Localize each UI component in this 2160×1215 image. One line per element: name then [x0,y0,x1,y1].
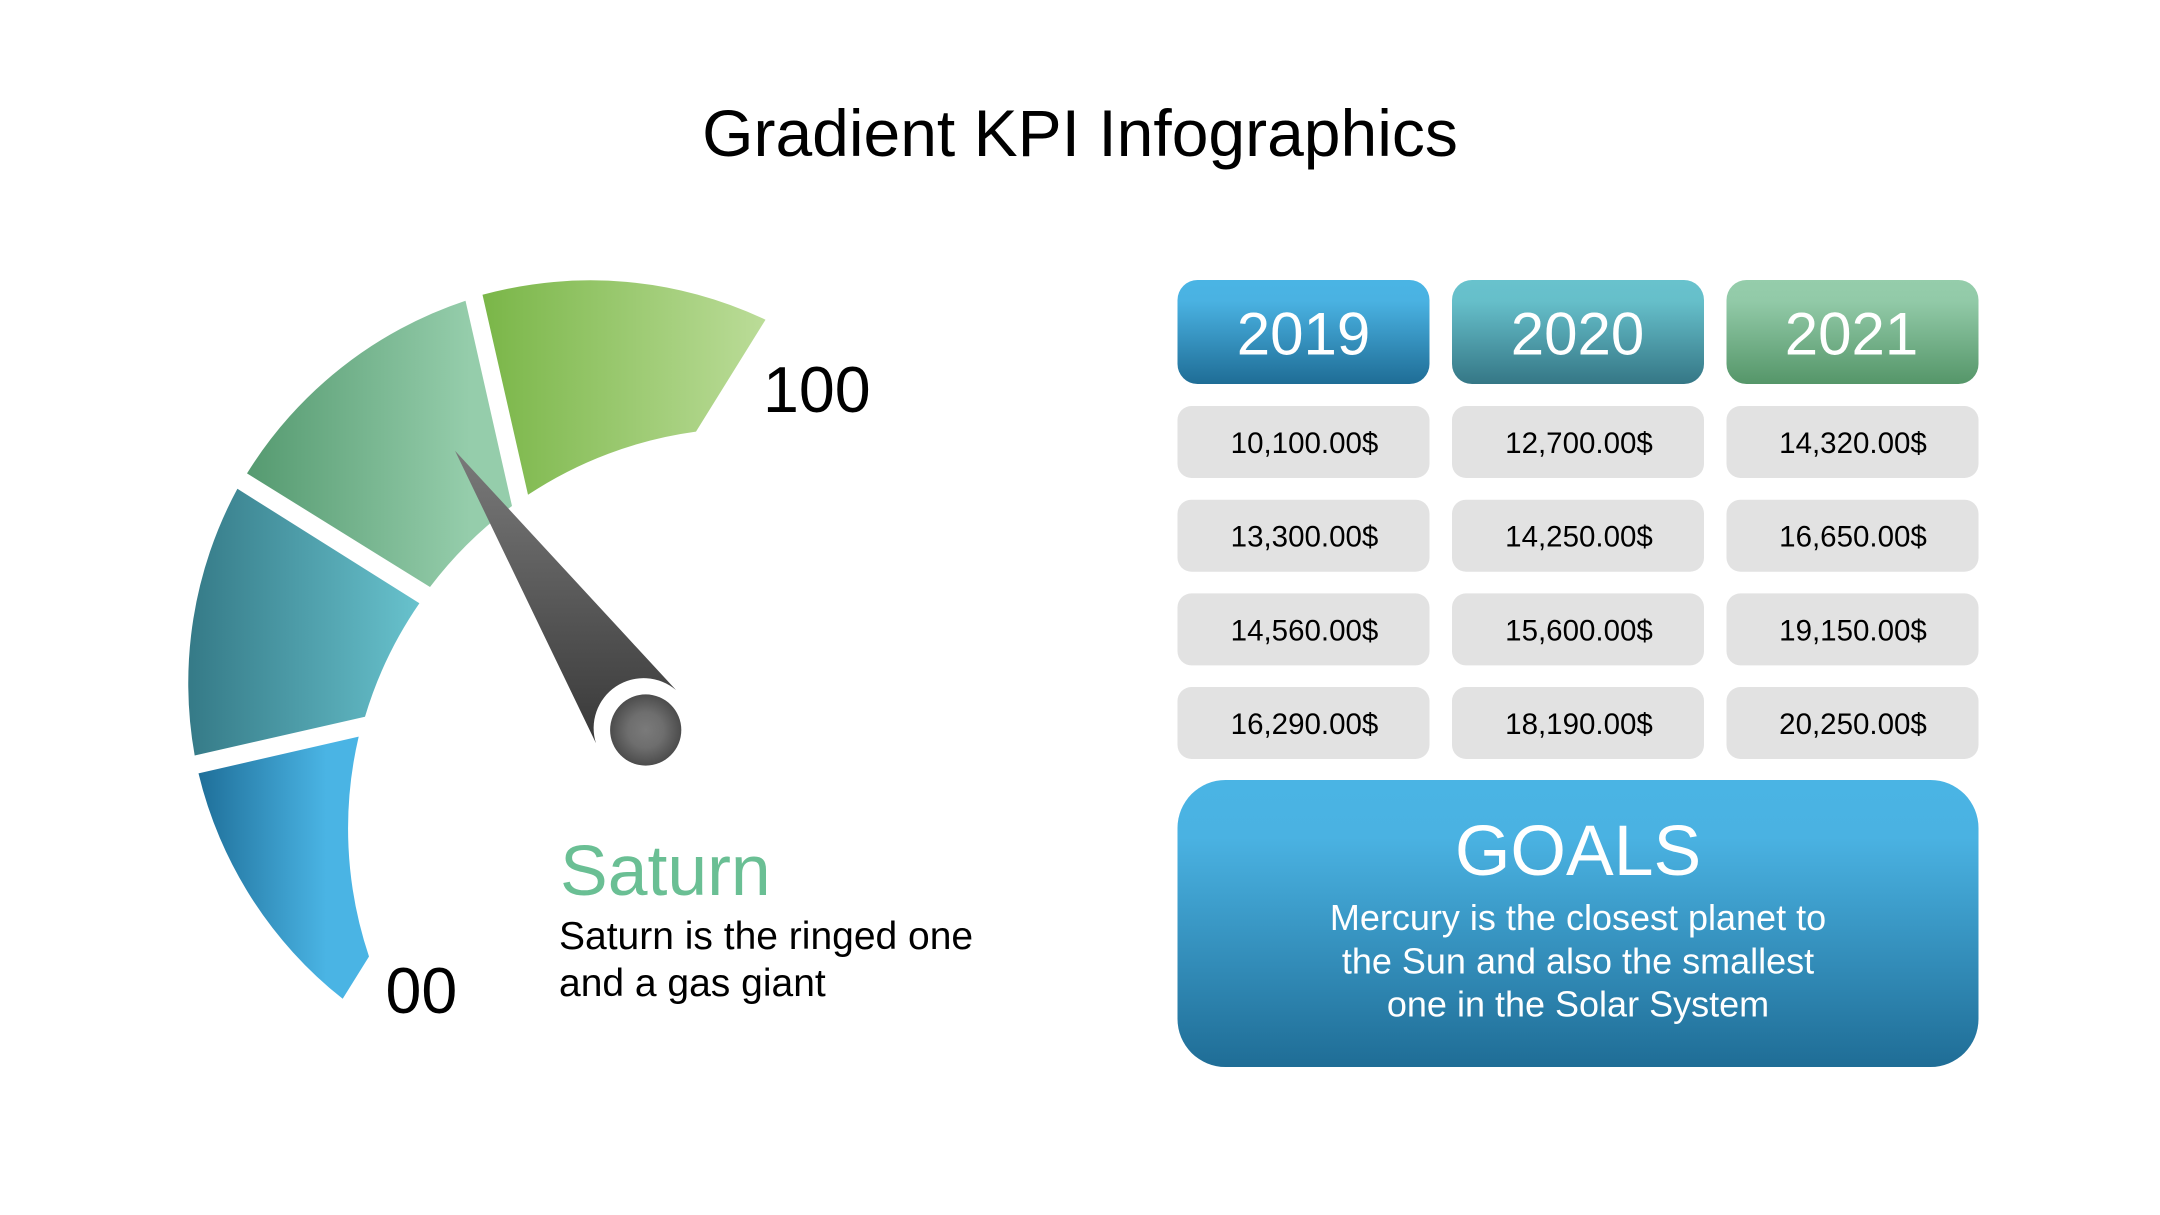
table row 1: 10,100.00$ [1231,427,1378,460]
column header: 2020: 2020 [1511,300,1644,368]
table row 2 [1178,500,1978,572]
goals text: the Sun and also the smallest [1342,940,1814,982]
table row 1 [1178,406,1978,478]
gauge maximum label: 100 [763,354,871,426]
caption text: Saturn is the ringed one [559,915,973,958]
column header: 2021 [1726,280,1978,384]
table row 4: 18,190.00$ [1505,708,1653,741]
table row 2: 14,250.00$ [1505,521,1653,554]
gauge hub [610,694,681,766]
column header: 2021: 2021 [1785,300,1918,368]
goals heading: GOALS [1455,811,1701,891]
title: Gradient KPI Infographics [702,96,1458,170]
goals text: one in the Solar System [1387,984,1769,1024]
table row 1: 12,700.00$ [1505,427,1653,460]
column header: 2019 [1178,280,1430,384]
table row 3: 15,600.00$ [1505,614,1653,647]
gauge segment: teal [188,489,419,756]
table row 2: 13,300.00$ [1231,521,1378,554]
table row 4: 16,290.00$ [1231,708,1378,741]
gauge segment: blue [198,737,369,999]
gauge caption [559,831,973,1005]
table row 3: 14,560.00$ [1231,614,1378,647]
caption heading: Saturn [560,831,771,911]
gauge needle [455,451,676,743]
gauge segment: light green [482,280,766,495]
table row 2: 16,650.00$ [1779,521,1927,554]
gauge chart [188,280,766,999]
gauge minimum label: 00 [386,955,457,1027]
column header: 2020 [1452,280,1704,384]
goals text: Mercury is the closest planet to [1330,897,1826,938]
panel: goals [1178,780,1978,1067]
column header: 2019: 2019 [1237,300,1370,368]
table row 1: 14,320.00$ [1779,427,1927,460]
gauge segment: green [247,301,512,587]
table row 4: 20,250.00$ [1779,708,1927,741]
caption text: and a gas giant [559,962,826,1005]
table row 3 [1178,593,1978,665]
KPI table [1178,280,1978,759]
table row 3: 19,150.00$ [1779,614,1927,647]
table row 4 [1178,687,1978,759]
